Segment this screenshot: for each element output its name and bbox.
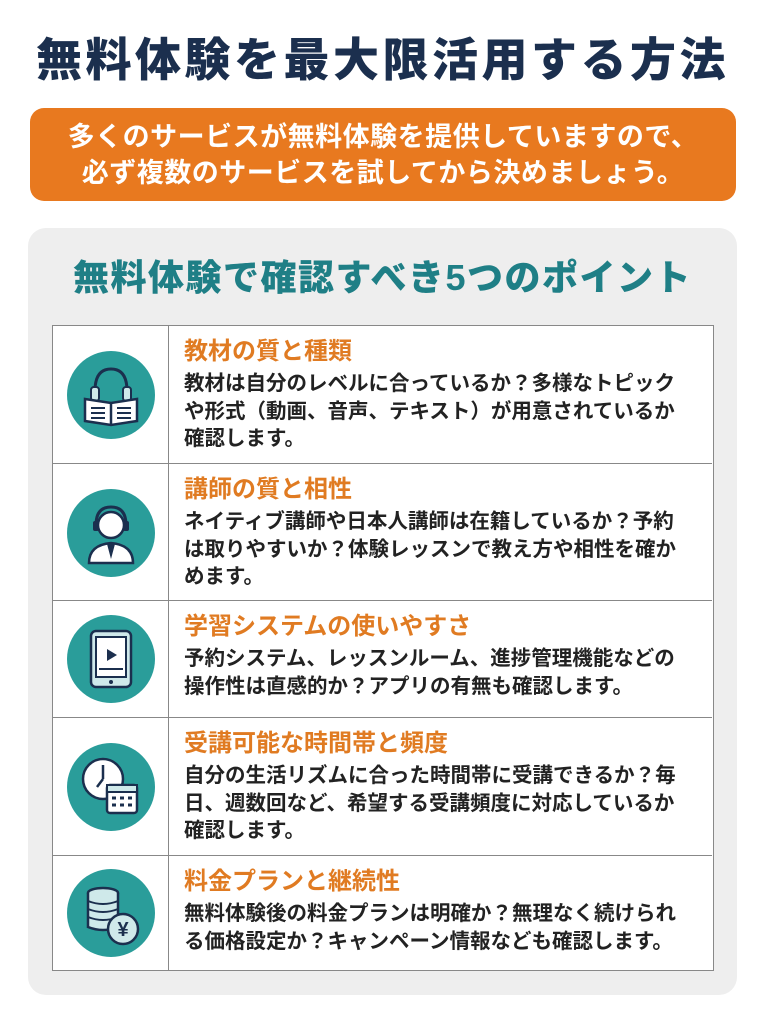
text 2 <box>184 476 676 588</box>
icon: clock calendar <box>53 718 169 855</box>
text 2: めます。 <box>184 565 264 588</box>
banner <box>30 108 736 201</box>
text 3 <box>184 613 675 698</box>
text 3: 操作性は直感的か？アプリの有無も確認します。 <box>184 674 633 698</box>
text 3: 予約システム、レッスンルーム、進捗管理機能などの <box>184 647 675 670</box>
text 4: 受講可能な時間帯と頻度 <box>184 730 448 757</box>
text 5: る価格設定か？キャンペーン情報なども確認します。 <box>184 930 673 952</box>
text 5: 無料体験後の料金プランは明確か？無理なく続けられ <box>184 902 676 925</box>
row 5 <box>67 856 676 970</box>
icon: coins yen: ¥ <box>117 919 129 941</box>
row 2 <box>53 464 712 601</box>
icon: book headphones <box>53 326 169 463</box>
text 1: 確認します。 <box>184 427 305 450</box>
text 4 <box>184 730 676 842</box>
text 5 <box>184 868 676 952</box>
table <box>52 325 714 971</box>
text 2: 講師の質と相性 <box>184 476 352 503</box>
banner: 必ず複数のサービスを試してから決めましょう。 <box>82 158 684 188</box>
text 5: 料金プランと継続性 <box>184 868 400 895</box>
text 3: 学習システムの使いやすさ <box>184 613 471 640</box>
text 4: 日、週数回など、希望する受講頻度に対応しているか <box>184 792 674 814</box>
row 4 <box>53 718 712 856</box>
text 1: 教材の質と種類 <box>184 338 352 365</box>
text 4: 自分の生活リズムに合った時間帯に受講できるか？毎 <box>184 764 676 787</box>
text 1 <box>184 338 675 450</box>
panel: points <box>28 228 737 995</box>
text 2: ネイティブ講師や日本人講師は在籍しているか？予約 <box>184 510 674 533</box>
text 1: 教材は自分のレベルに合っているか？多様なトピック <box>184 372 675 395</box>
icon: coins yen <box>53 856 169 970</box>
text 4: 確認します。 <box>184 819 305 842</box>
row 3 <box>53 601 712 718</box>
banner: 多くのサービスが無料体験を提供していますので、 <box>68 122 698 152</box>
icon: tablet <box>53 601 169 717</box>
subtitle: 無料体験で確認すべき5つのポイント <box>73 257 692 298</box>
icon: instructor <box>53 464 169 600</box>
row 1 <box>53 326 712 464</box>
text 2: は取りやすいか？体験レッスンで教え方や相性を確か <box>184 538 676 560</box>
text 1: や形式（動画、音声、テキスト）が用意されているか <box>184 400 675 422</box>
title: 無料体験を最大限活用する方法 <box>36 34 729 86</box>
